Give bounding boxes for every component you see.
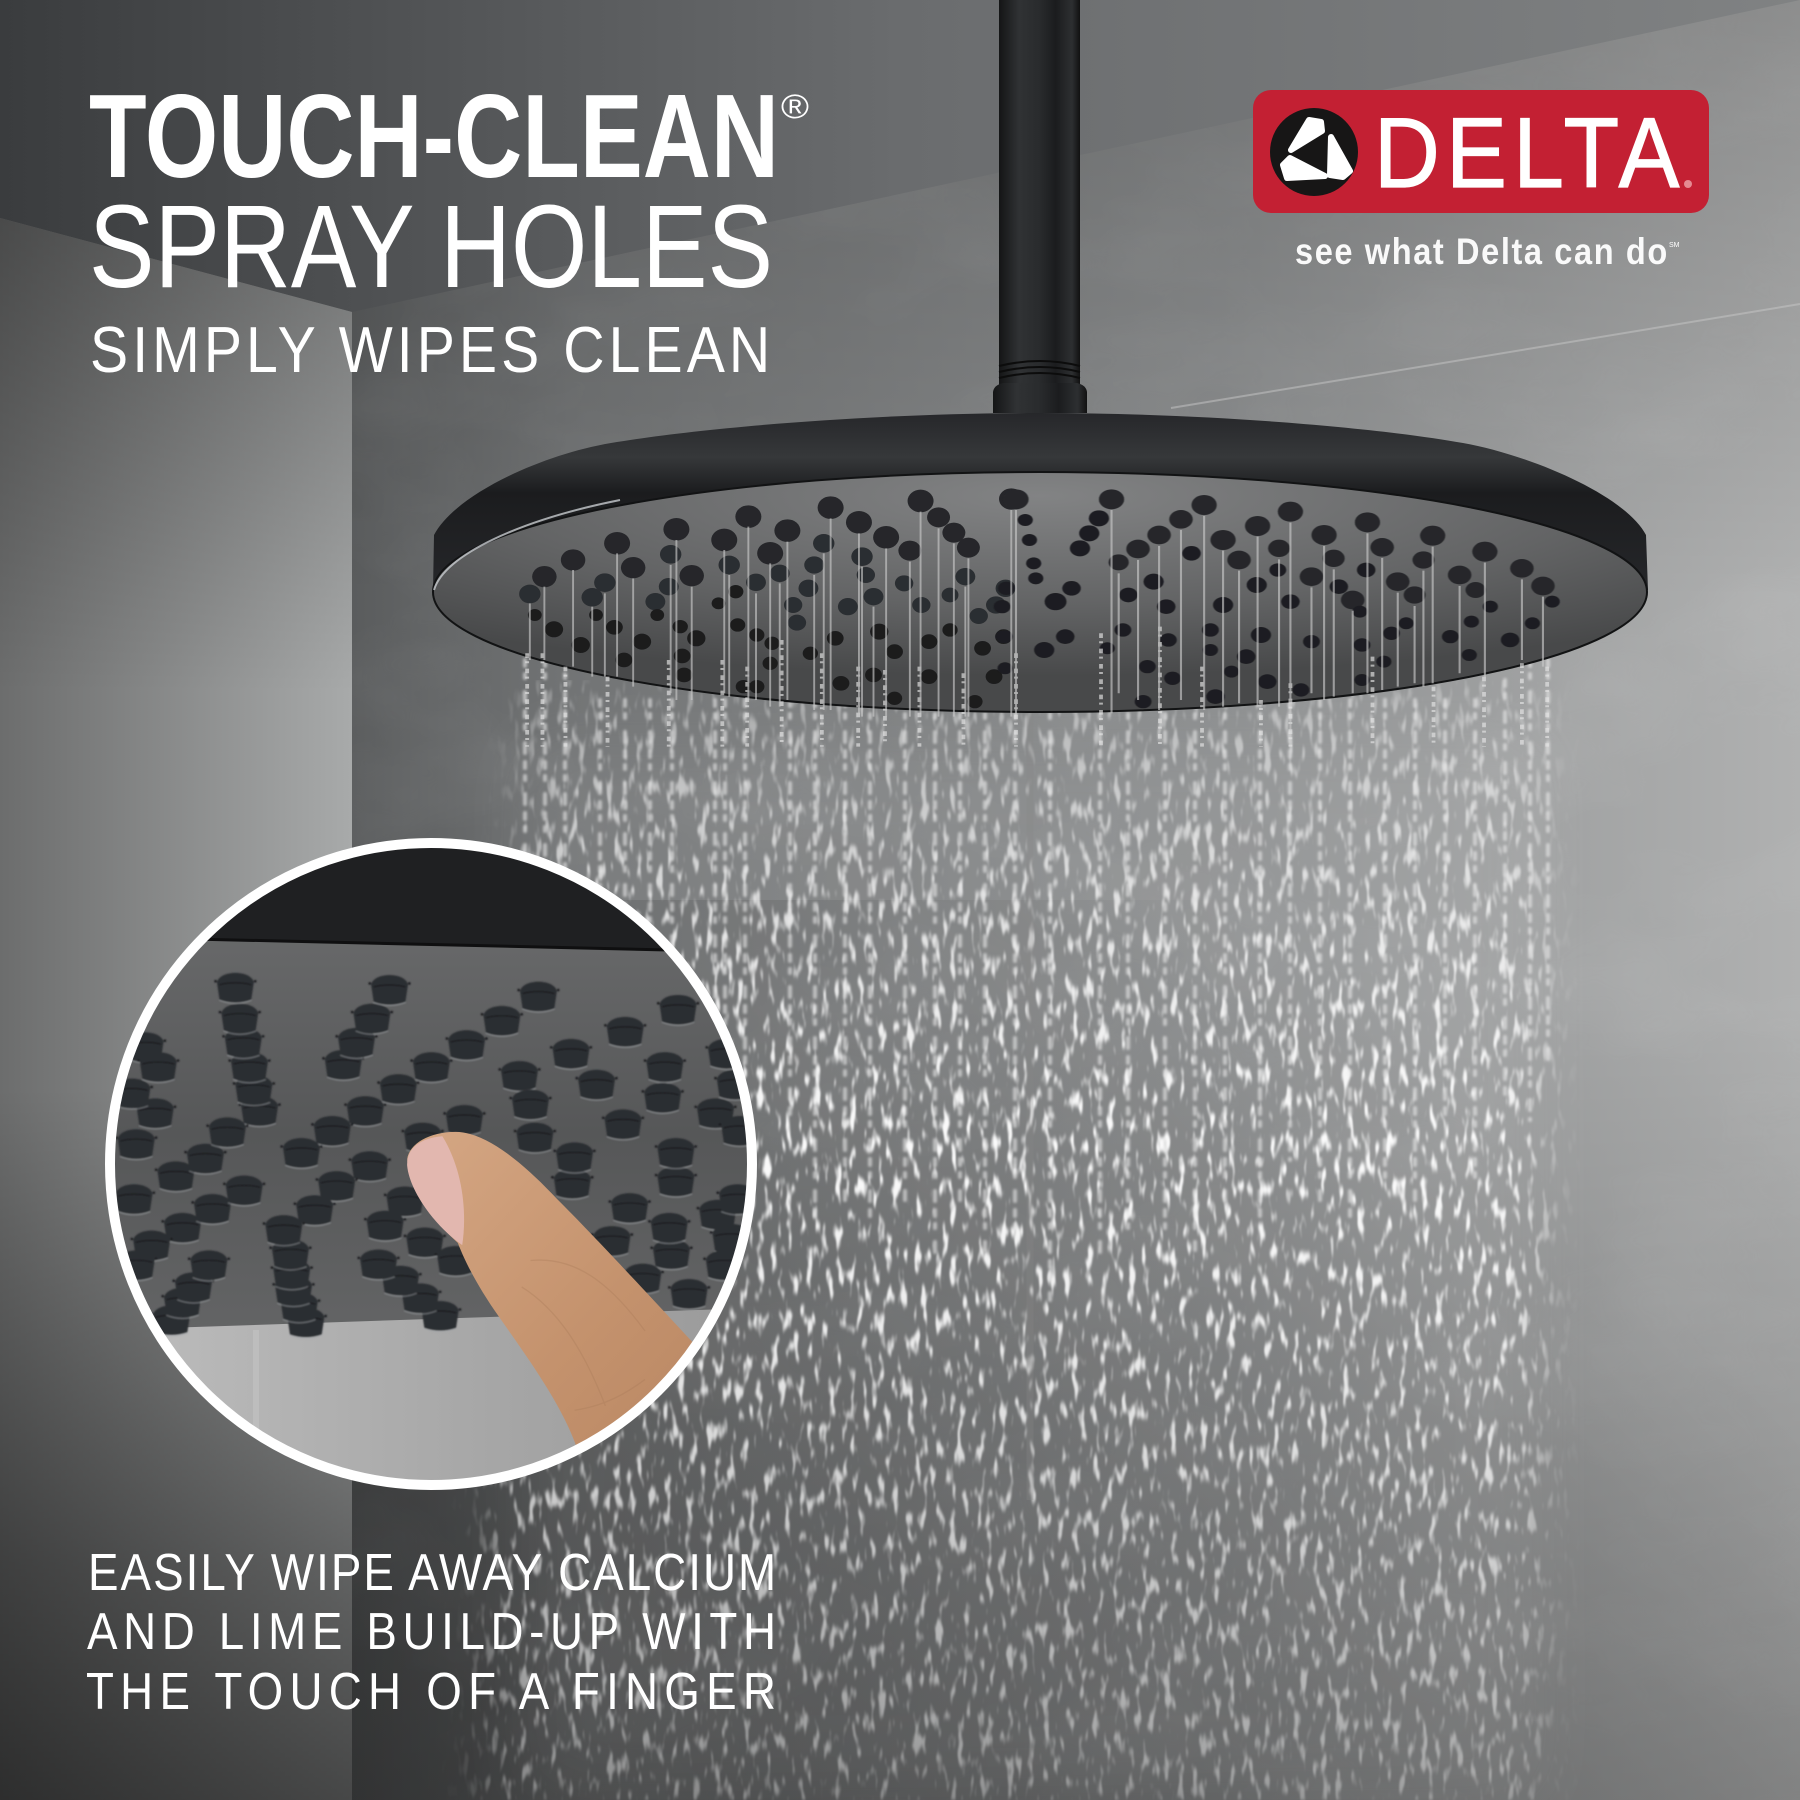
water spray (440, 620, 1580, 1800)
nozzles (111, 973, 761, 1338)
inset circle: finger on spray holes (105, 838, 761, 1490)
body copy: AND LIME BUILD-UP WITH (87, 1603, 776, 1661)
head rim (433, 413, 1648, 590)
body copy: EASILY WIPE AWAY CALCIUM (88, 1544, 776, 1602)
logo red badge (1253, 90, 1709, 213)
subtitle: SIMPLY WIPES CLEAN (90, 314, 770, 386)
finger (407, 1132, 707, 1454)
shower head (433, 413, 1648, 747)
water streams left half (527, 510, 1011, 747)
body copy: THE TOUCH OF A FINGER (86, 1663, 776, 1721)
inset photo (105, 838, 761, 1490)
registered mark: ® (781, 88, 809, 126)
Delta logo (1253, 90, 1709, 213)
nozzles left half (519, 488, 1024, 708)
nozzles right half (994, 489, 1560, 708)
title: Touch-Clean: TOUCH-CLEAN (89, 70, 779, 203)
logo registered dot (1684, 180, 1692, 188)
logo wordmark: DELTA (1374, 99, 1680, 209)
body copy (86, 1544, 776, 1721)
tagline: see what Delta can do (1295, 231, 1667, 272)
rim highlight (434, 500, 620, 590)
title: Spray Holes: SPRAY HOLES (89, 181, 773, 313)
shower arm (993, 0, 1087, 413)
head face (433, 472, 1647, 712)
tagline: SM (1669, 242, 1680, 249)
water streams right half (1016, 510, 1547, 747)
inset ring (110, 843, 752, 1485)
logo emblem (1270, 108, 1358, 196)
